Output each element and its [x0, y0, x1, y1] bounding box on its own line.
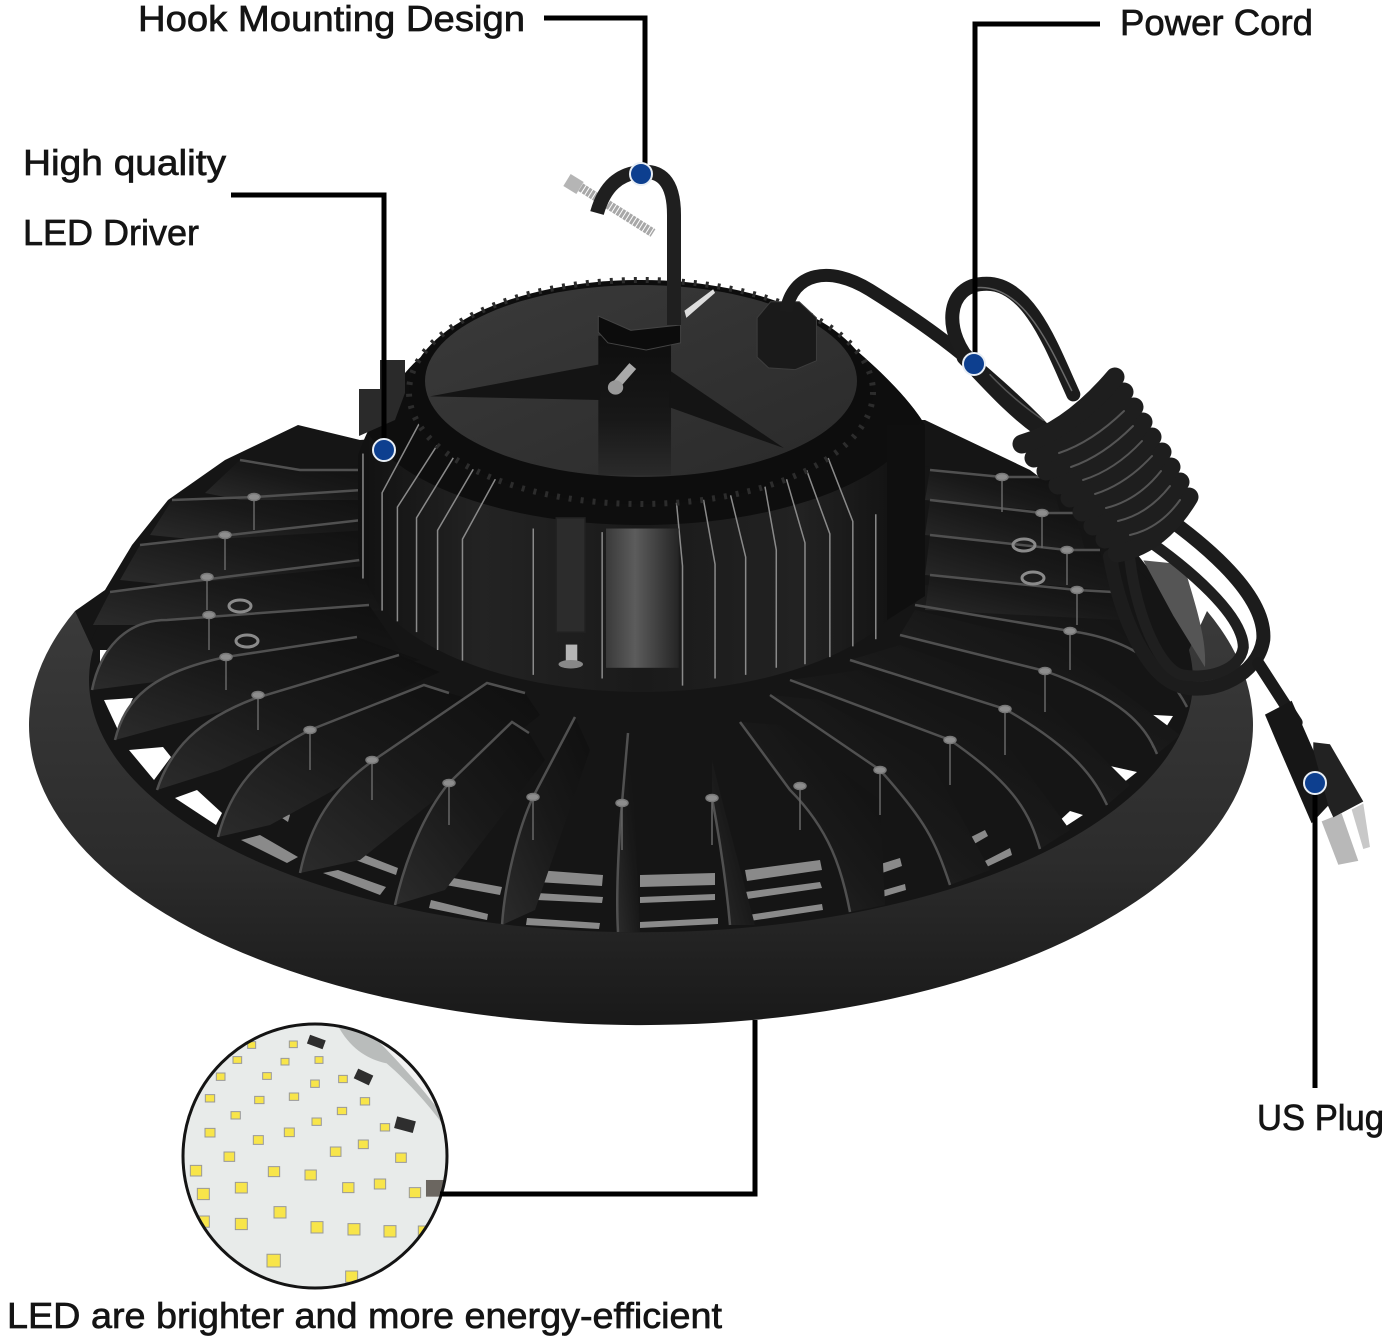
power cord lower loops — [1110, 501, 1297, 723]
rib ring under top plate — [409, 280, 873, 504]
callout line: LED board — [440, 1020, 755, 1194]
label: High quality LED Driver: High quality — [23, 142, 226, 183]
strain relief — [1265, 701, 1328, 823]
lamp base disc silhouette — [75, 420, 1253, 960]
plug head — [1313, 742, 1363, 817]
radiator fin top edges — [92, 460, 1187, 932]
callout line: hook — [544, 18, 645, 170]
marker: driver — [373, 439, 395, 461]
top plate — [425, 285, 857, 477]
driver tube — [556, 518, 585, 632]
grey reflector slats — [241, 795, 1012, 929]
power cord from gland — [786, 275, 1040, 425]
bolt on hook — [567, 180, 653, 233]
marker: hook — [630, 163, 652, 185]
callout line: power cord — [975, 24, 1100, 360]
coil backing — [1022, 377, 1189, 553]
cord coil — [1022, 377, 1189, 553]
label: Power Cord: Power Cord — [1120, 2, 1313, 43]
hook base bracket — [598, 316, 681, 350]
label: US Plug: US Plug — [1257, 1097, 1384, 1138]
cable gland — [757, 302, 816, 370]
driver front panel — [606, 529, 679, 668]
LED board circle — [183, 1024, 447, 1288]
plug prongs — [1322, 804, 1370, 865]
circle outline — [183, 1024, 447, 1288]
driver body — [358, 345, 925, 692]
label: High quality LED Driver — [23, 142, 226, 253]
plate shadow wedges — [430, 364, 784, 448]
board contents — [190, 1017, 453, 1282]
LED driver housing — [358, 275, 925, 692]
product: UFO LED high bay light — [29, 172, 1370, 1025]
label: LED caption: LED are brighter and more energy-efficient — [7, 1295, 722, 1336]
outer ring — [29, 611, 1253, 1025]
lamp interior fill — [81, 430, 1201, 950]
fin pins — [201, 474, 1083, 806]
board grey edge — [339, 1028, 441, 1122]
plate details — [430, 289, 816, 475]
shoulder shadow band — [392, 350, 921, 525]
hanging hook — [597, 172, 674, 325]
power cord upper loop — [952, 284, 1073, 428]
fin pin stems — [207, 477, 1077, 850]
marker: power cord — [963, 353, 985, 375]
US plug — [1265, 701, 1370, 865]
callout line: US plug — [1312, 790, 1318, 1088]
center post — [598, 336, 671, 475]
plate slot — [684, 289, 715, 318]
white gaps between fins — [100, 650, 1173, 841]
marker: US plug — [1304, 772, 1326, 794]
driver side brackets — [359, 360, 405, 436]
driver bottom screw — [559, 645, 583, 669]
label: High quality LED Driver: LED Driver — [23, 212, 199, 253]
callout line: driver — [231, 195, 384, 445]
inset: LED board close-up — [183, 1017, 453, 1288]
dark driver chips — [307, 1035, 446, 1197]
yellow LEDs — [190, 1041, 428, 1282]
driver heat sink ribs — [363, 407, 876, 686]
side screw — [608, 366, 633, 395]
driver right bracket — [887, 425, 925, 620]
mounting eyelets — [229, 539, 1044, 647]
radiator fin faces — [92, 460, 1195, 932]
